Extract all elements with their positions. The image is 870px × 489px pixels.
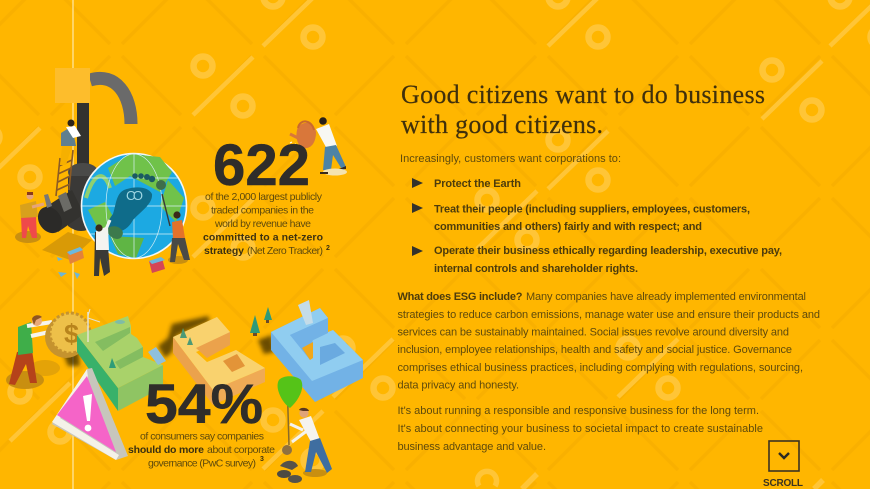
icon: person on ladder [60,120,81,165]
stat: 622 companies: 622 [213,133,310,198]
text: 622 caption: 2 [326,245,330,252]
text: 54% caption [128,430,275,470]
icon: person planting a tree [277,376,332,483]
text: 54% caption: 3 [260,456,264,463]
heading: Good citizens want to do business [401,80,765,109]
text: 54% caption: governance (PwC survey) [148,458,256,470]
text: 622 caption [203,191,330,257]
text: bullet 1: Protect the Earth [434,178,521,190]
icon: bullet arrow 2 [412,203,423,213]
icon: carbon footprint: CO [126,188,143,203]
shadows behind letters [62,316,274,366]
icon: square block on faucet [55,68,90,103]
illustration: faucet and globe [15,68,190,279]
text: 622 caption: world by revenue have [214,218,311,230]
heading: with good citizens. [401,110,603,139]
text: bullet 2: Treat their people (including suppliers, employees, customers, [434,204,750,216]
list: customer expectations [412,178,782,275]
icon: bullet arrow 1 [412,178,423,188]
icon: warning triangle [52,368,128,460]
text: closing statement [398,405,763,453]
vertical timeline line [72,0,74,489]
text: closing statement: It's about connecting your business to societal impact to create sustainable [398,423,763,435]
text: what does ESG include: Many companies have already implemented environmental [526,291,806,303]
text: what does ESG include: inclusion, employee relationships, health and safety and social justice. Governance [398,344,792,356]
text: bullet 2 [434,204,750,233]
icon: person with brush at globe [94,220,110,276]
icon: person pushing coin [6,315,60,389]
icon: letter S orange [173,317,265,405]
text: 54% caption: about corporate [207,444,275,456]
text: 622 caption: (Net Zero Tracker) [247,245,323,257]
text: 54% caption: of consumers say companies [140,430,264,442]
stat: 54% of consumers: 54% [145,372,263,435]
text: intro line: Increasingly, customers want corporations to: [400,153,621,165]
text: 622 caption: of the 2,000 largest publicly [205,191,323,203]
icon: person at left turning valve [15,192,44,243]
icon: trees [250,307,272,336]
text: scroll label: SCROLL [763,478,803,489]
text: 622 caption: traded companies in the [211,204,314,216]
icon: person in orange on right [168,211,190,264]
text: closing statement: business advantage and value. [398,441,546,453]
text: what does ESG include: data privacy and honesty. [398,380,519,392]
text: bullet 3: Operate their business ethically regarding leadership, executive pay, [434,245,782,257]
text: bullet 3: internal controls and shareholder rights. [434,263,638,275]
text: 622 caption: strategy [204,245,244,257]
text: bullet 3 [434,245,782,275]
icon: bullet arrow 3 [412,246,423,256]
stat: 622 companies [203,133,330,257]
icon: faucet [33,78,131,260]
text: what does ESG include: strategies to reduce carbon emissions, manage water use and ensure their products and [398,309,820,321]
text: bullet 2: communities and others) fairly and with respect; and [434,221,702,233]
icon: water buckets [57,247,165,279]
text: 54% caption: should do more [128,444,204,456]
text: what does ESG include [398,291,820,392]
icon: letter E green [77,309,166,411]
icon: ladder [56,150,73,196]
icon: globe [82,154,186,258]
icon: letter G blue [271,300,363,402]
heading [401,80,765,139]
text: 622 caption: committed to a net-zero [203,232,323,244]
icon: gold coin [45,313,90,358]
icon: person with watering can [285,117,347,176]
illustration: ESG letters [6,300,363,411]
icon: gold coin: $ [64,319,79,349]
icon: scroll button [763,441,803,489]
text: what does ESG include: What does ESG include? [398,291,523,303]
text: what does ESG include: services can be sustainably maintained. Social issues revolve around diversity and [398,326,789,338]
stat: 54% of consumers [128,372,275,470]
text: closing statement: It's about running a responsible and responsive business for the long term. [398,405,759,417]
text: what does ESG include: comprises ethical business practices, including complying with regulations, sourcing, [398,362,803,374]
